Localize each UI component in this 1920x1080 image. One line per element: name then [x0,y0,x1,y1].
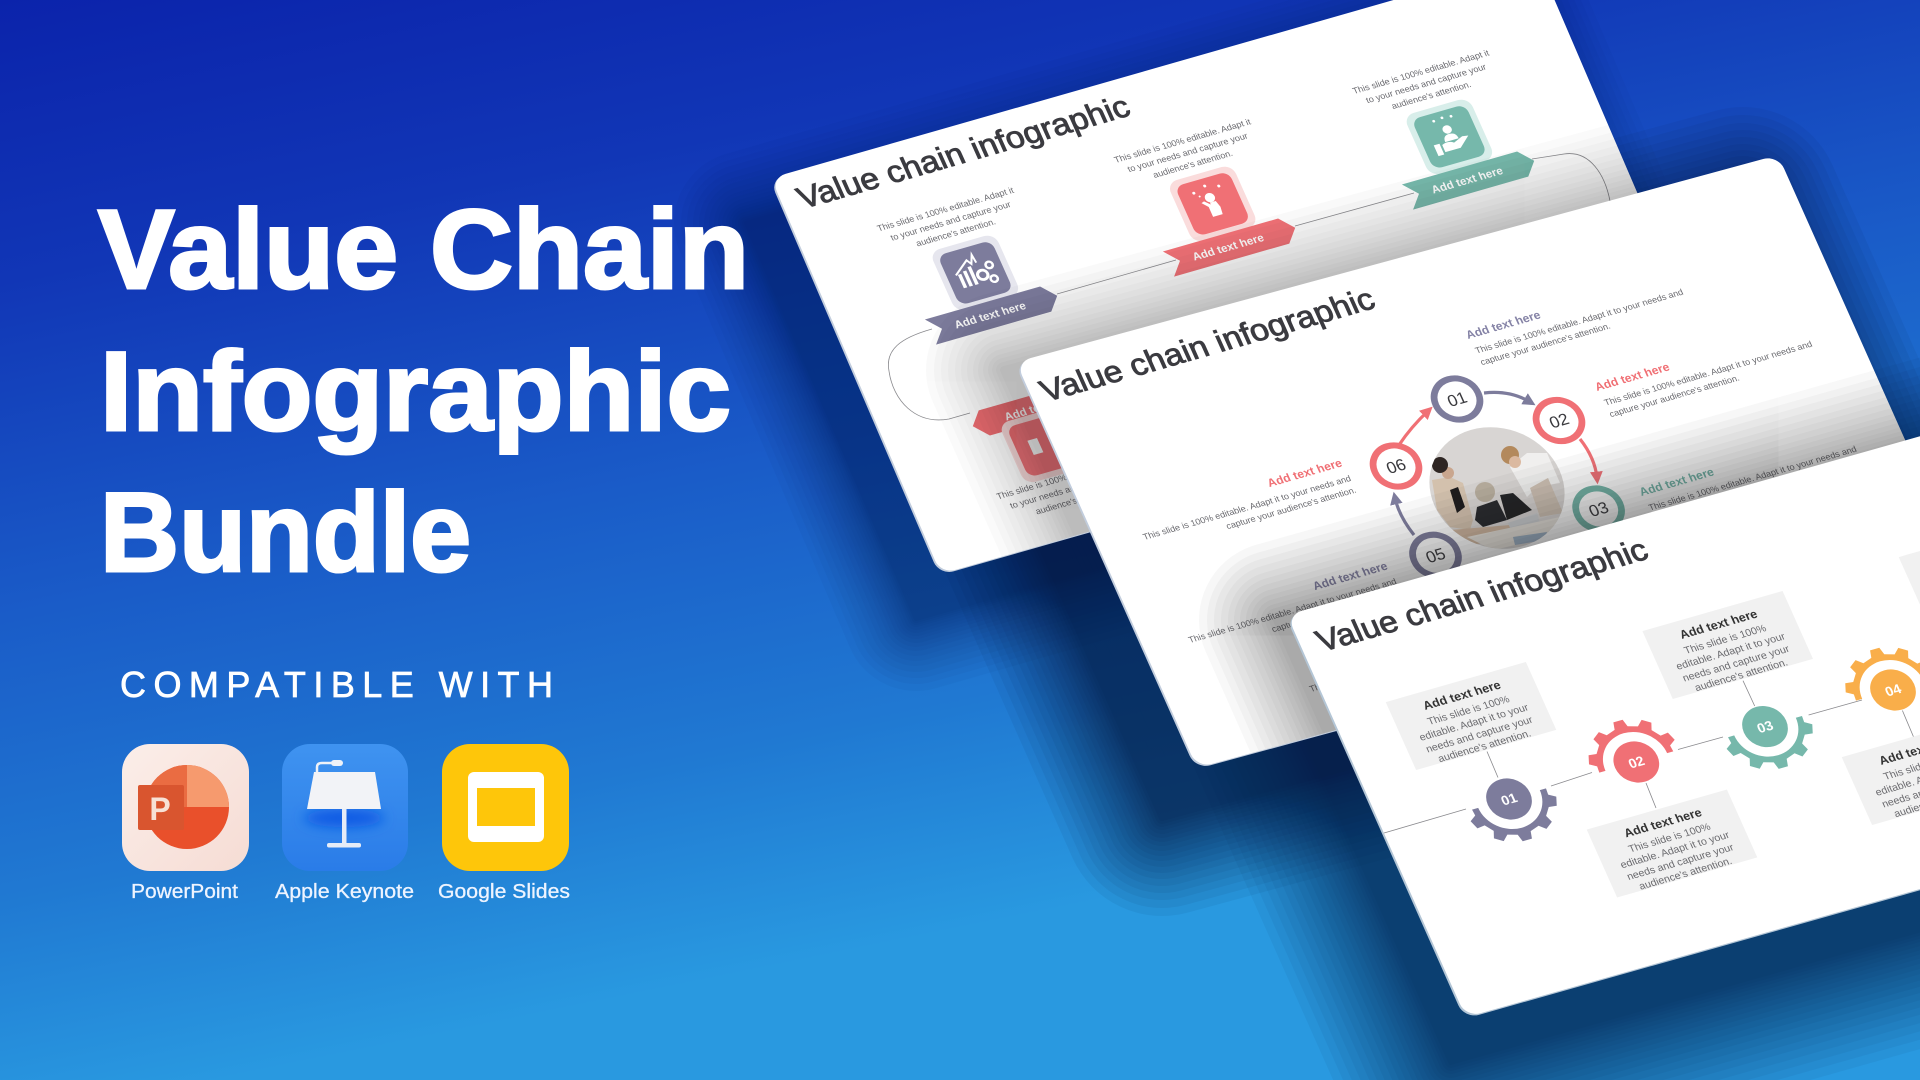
shadow of slide 3 on background [1272,444,1920,1062]
arrows: cycle [1395,392,1597,535]
slide 1 tile: purple [929,233,1022,313]
text: item 03 [1637,426,1863,525]
node 06: 06 [1383,455,1409,478]
slide 1 ribbon: purple [925,283,1063,345]
text box 02: editable. Adapt it to your [1619,830,1732,871]
gear 01 [1457,767,1570,852]
text box 03: needs and capture your [1681,644,1792,684]
node 03 [1569,483,1629,535]
slide 1 text: step 2: to your needs and capture your [1126,131,1249,174]
shadow of slide 2 on slide 1 [934,132,1638,554]
slide 1 text: step 4: to your needs and capture your [1008,467,1132,511]
text box 02: audience's attention. [1638,856,1734,892]
compatible with label: COMPATIBLE WITH [120,664,553,705]
slide 1 heading: Value chain infographic [791,88,1135,215]
slide 1 ribbon: red lower [967,377,1105,439]
slide 3 edge [1286,401,1920,1019]
gear 04 [1832,637,1920,722]
slide 1 ribbon: teal: Add text here [1430,165,1505,196]
text: item 02 [1593,321,1819,420]
text: item 06: capture your audience's attention. [1224,485,1358,531]
title: Infographic [100,329,731,454]
text: item 02: This slide is 100% editable. Adapt it to your needs and [1602,339,1814,407]
slide 1 text: step 4 [995,453,1146,524]
node 05 [1406,530,1465,581]
slide 1 ribbon: red lower: Add text here [1003,392,1078,423]
text box 01: This slide is 100% [1426,694,1512,728]
text box 04 [1842,717,1920,827]
slide 1 text: step 1 [875,185,1026,256]
label: Google Slides: Google Slides [438,881,570,903]
text: item 01 [1464,269,1690,368]
slide 1 ribbon: red [1163,215,1301,277]
slide 1 text: step 1: This slide is 100% editable. Adapt it [875,185,1016,233]
slide 1 text: step 2: audience's attention. [1151,148,1234,180]
slide 1 edge [770,0,1705,575]
text box 03 [1642,591,1814,701]
text box 02: Add text here [1622,806,1704,840]
slide 1 text: step 1: audience's attention. [914,217,997,248]
label: Apple Keynote: Apple Keynote [275,881,414,903]
slide 1 tile: red [1166,164,1259,244]
slide 2 card [1016,155,1920,768]
text: item 05: This slide is 100% editable. Adapt it to your needs and [1187,576,1398,645]
text box 01 [1386,662,1557,772]
gear 02: 02 [1626,752,1647,771]
slide 1 ribbon: red: Add text here [1191,232,1266,263]
slide 1 text: step 3 [1351,48,1502,119]
slide 1 text: step 4: audience's attention. [1034,485,1117,516]
slide 1 ribbon: purple: Add text here [953,300,1028,331]
slide 1 text: step 2 [1112,117,1263,188]
node 03: 03 [1586,498,1612,521]
slide 1 tile: teal [1403,97,1496,177]
gear 03: 03 [1754,717,1776,736]
gear 02 [1575,709,1688,794]
node 02: 02 [1546,410,1572,432]
text: item 01: This slide is 100% editable. Adapt it to your needs and [1473,287,1685,355]
text box 03: This slide is 100% [1683,623,1768,657]
text: item 01: Add text here [1464,308,1543,342]
text box 01: Add text here [1421,678,1503,713]
text: item 04: This slide is 100% editable. Adapt it to your needs and [1308,625,1519,694]
slide 2 heading: Value chain infographic [1034,281,1380,408]
slide 1 ribbon: teal [1402,148,1540,210]
title: Bundle [100,470,471,595]
icon: growth chart with gears [950,251,1000,291]
panel: slide 3 [1286,399,1920,1019]
node 01: 01 [1444,388,1470,411]
gear 04: 04 [1882,680,1904,699]
slide 1 card [771,0,1707,574]
text box 03: Add text here [1677,607,1760,642]
slide 3 card [1287,399,1920,1017]
text: item 05: Add text here [1310,559,1390,593]
slide 2 edge [1015,156,1920,769]
icon: hand with flower [1190,181,1232,220]
text: item 02: Add text here [1593,360,1672,394]
text: item 06: This slide is 100% editable. Adapt it to your needs and [1141,473,1353,542]
text: item 03: capture your audience's attention. [1652,478,1785,524]
text: item 02: capture your audience's attention. [1608,373,1741,419]
text box 01: audience's attention. [1437,729,1533,765]
slide 1 text: step 3: This slide is 100% editable. Adapt it [1351,48,1491,96]
text box 03: editable. Adapt it to your [1675,632,1788,673]
text box 02 [1587,789,1758,899]
text: item 05: capture your audience's attention. [1270,588,1403,634]
slide 1 text: step 3: audience's attention. [1390,79,1473,111]
text box 01: needs and capture your [1424,715,1535,755]
node 05: 05 [1423,545,1449,567]
slide 1 text: step 4: This slide is 100% editable. Adapt it [995,453,1135,501]
icon: PowerPoint [122,744,249,871]
node 06 [1366,440,1426,492]
icon: PowerPoint: P [149,791,171,827]
label: PowerPoint: PowerPoint [131,881,238,903]
text box 03: audience's attention. [1693,658,1790,694]
icon: Google Slides [442,744,569,871]
text: item 01: capture your audience's attention. [1479,321,1612,367]
title [98,187,749,595]
text box 02: This slide is 100% [1627,822,1713,855]
text: item 05 [1179,558,1403,656]
text: item 06: Add text here [1265,456,1345,490]
icon: Apple Keynote [282,744,408,871]
shadow of slide 3 on slide 2 [1207,378,1906,751]
node 02 [1529,395,1589,446]
text box 05 [1899,517,1920,625]
text box 01: editable. Adapt it to your [1418,703,1531,744]
node 01 [1427,373,1487,425]
slide 1 text: step 1: to your needs and capture your [889,199,1012,243]
title: Value Chain [98,187,749,312]
panel: slide 2 [1015,155,1920,769]
photo: team meeting [1430,427,1564,549]
text box 02: needs and capture your [1625,842,1736,883]
text: item 06 [1133,455,1358,553]
gear 01: 01 [1498,789,1520,808]
timeline [1384,681,1914,833]
slide 1 text: step 3: to your needs and capture your [1364,62,1488,105]
slide 1 tile: red lower [998,405,1091,485]
shadow of slide 2 on background [981,205,1920,818]
slide 1 text: step 2: This slide is 100% editable. Adapt it [1112,117,1253,165]
gear 03 [1713,695,1826,780]
slide 1 connector path [888,154,1625,420]
panel: slide 1 [770,0,1707,575]
text: item 03: This slide is 100% editable. Adapt it to your needs and [1647,444,1858,512]
text: item 03: Add text here [1637,465,1717,499]
icon: hand holding person [1423,112,1473,156]
slide 3 heading: Value chain infographic [1310,532,1653,658]
shadow of slide 1 on background [746,4,1682,619]
